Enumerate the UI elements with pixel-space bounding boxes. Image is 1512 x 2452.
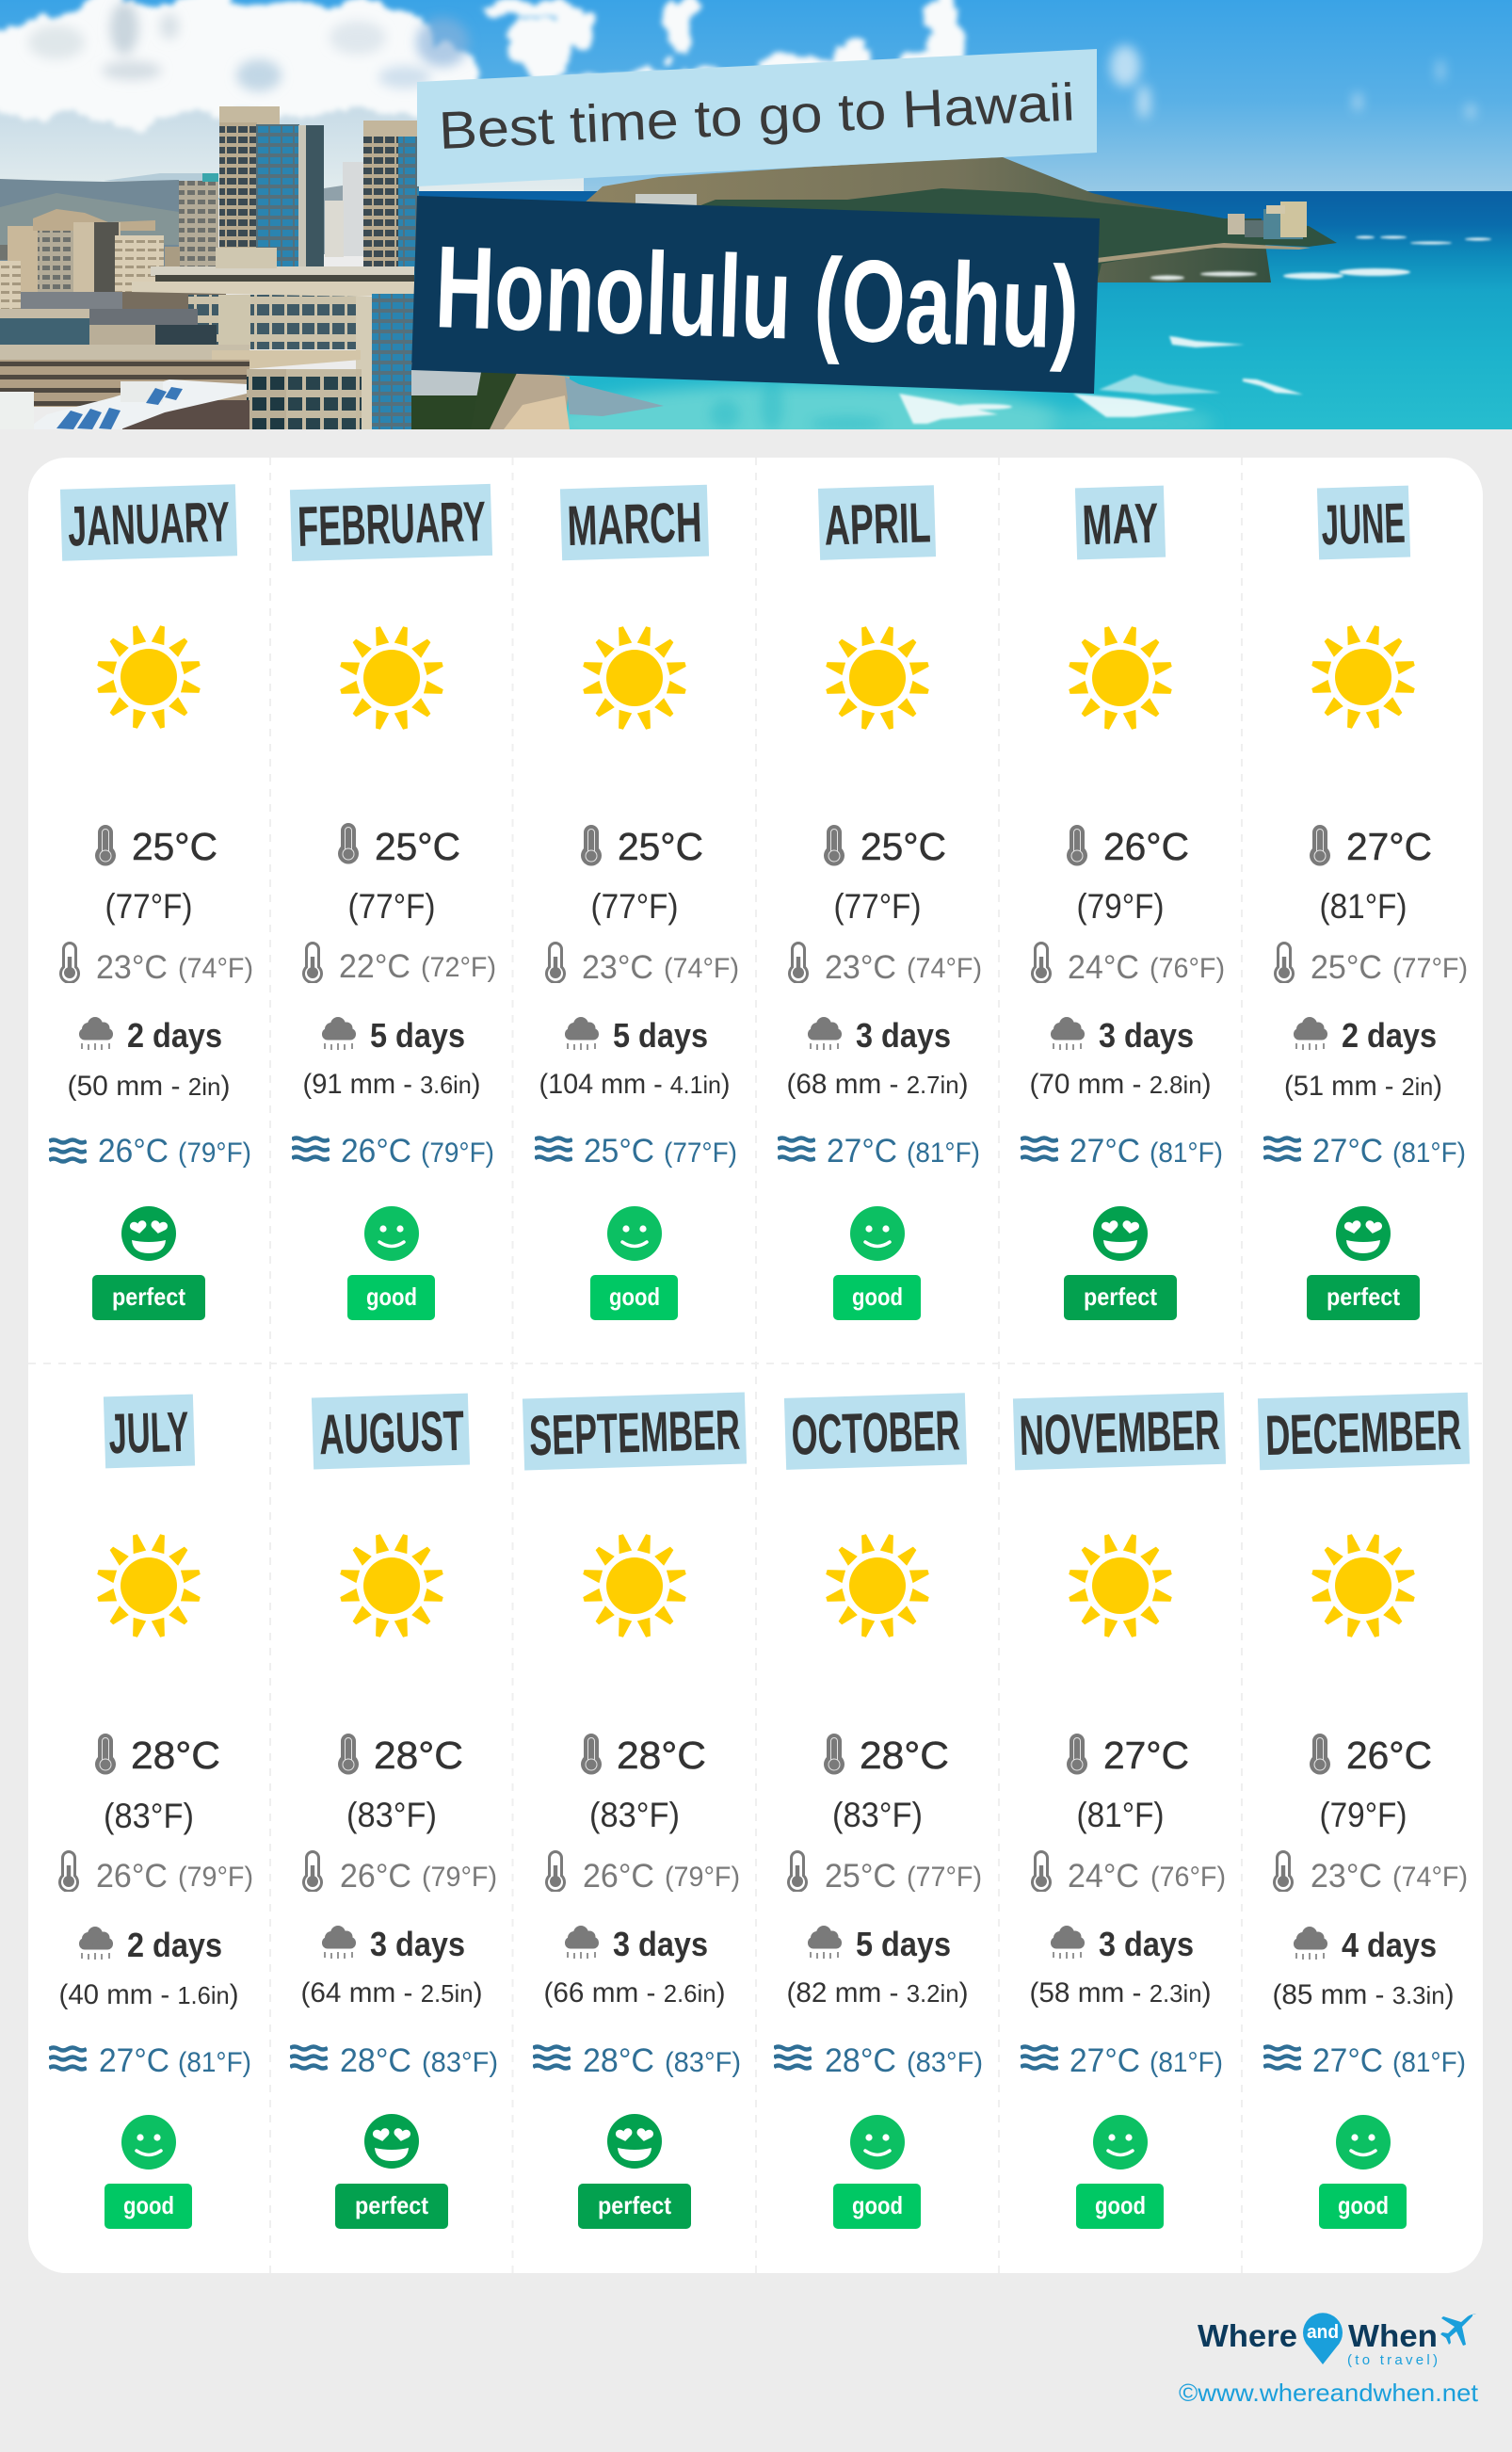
rainfall — [544, 1925, 725, 2008]
high temperature: (77°F) — [105, 887, 192, 926]
rating: good — [1076, 2115, 1164, 2229]
month label: SEPTEMBER — [528, 1398, 741, 1467]
month: June — [1263, 486, 1468, 1320]
rating: perfect: perfect — [1084, 1282, 1157, 1311]
sea temperature: (81°F) — [1392, 1137, 1466, 1169]
rating: good — [833, 2115, 921, 2229]
low temperature — [1032, 944, 1225, 986]
low temperature — [1275, 944, 1468, 986]
low temperature: 25°C — [825, 1858, 896, 1895]
month label: OCTOBER — [791, 1398, 960, 1467]
icon: airplane — [1440, 2315, 1476, 2346]
high temperature: 26°C — [1103, 825, 1189, 868]
rating: good — [833, 1206, 921, 1320]
sea temperature — [535, 1133, 737, 1170]
rainfall: (66 mm - 2.6in) — [544, 1977, 725, 2008]
rainfall: 2 days — [127, 1926, 222, 1964]
high temperature — [1067, 825, 1189, 926]
month label: JULY — [108, 1400, 190, 1465]
sea temperature: 27°C — [1070, 1133, 1140, 1170]
rainfall — [1284, 1016, 1442, 1102]
rainfall: (51 mm - 2in) — [1284, 1071, 1442, 1102]
low temperature — [1032, 1851, 1226, 1895]
low temperature: 25°C — [1311, 949, 1382, 986]
month: November — [1013, 1393, 1226, 2229]
rating: good: good — [609, 1282, 660, 1311]
month: May — [1021, 486, 1225, 1320]
icon: sun — [1068, 625, 1173, 731]
low temperature: 26°C — [340, 1858, 411, 1895]
low temperature: 23°C — [582, 949, 653, 986]
rating: good — [1319, 2115, 1407, 2229]
month: March — [535, 485, 739, 1320]
rainfall: 5 days — [370, 1016, 465, 1055]
icon: sun — [339, 625, 444, 731]
month label: JANUARY — [67, 490, 231, 558]
rainfall — [1273, 1926, 1454, 2010]
rating: perfect: perfect — [355, 2191, 428, 2219]
rainfall — [787, 1016, 968, 1100]
low temperature: (74°F) — [1392, 1862, 1468, 1893]
low temperature — [546, 1851, 740, 1895]
sea temperature: (81°F) — [1392, 2047, 1466, 2078]
rating: good: good — [1095, 2191, 1146, 2219]
rainfall: (70 mm - 2.8in) — [1030, 1069, 1211, 1100]
month label — [1013, 1393, 1226, 1470]
high temperature — [1310, 825, 1432, 926]
subtitle banner: Best time to go to Hawaii — [438, 72, 1076, 160]
sea temperature: 27°C — [827, 1133, 897, 1170]
rating: perfect — [1307, 1206, 1420, 1320]
low temperature: (77°F) — [907, 1862, 982, 1893]
rainfall — [59, 1926, 239, 2010]
high temperature: 25°C — [132, 825, 217, 868]
rainfall: (91 mm - 3.6in) — [303, 1069, 481, 1100]
high temperature: 28°C — [860, 1734, 949, 1777]
high temperature: (81°F) — [1077, 1796, 1164, 1834]
sea temperature — [1263, 1133, 1466, 1170]
low temperature: 24°C — [1068, 1858, 1139, 1895]
icon: location pin: and — [1307, 2322, 1339, 2343]
high temperature: 28°C — [617, 1734, 706, 1777]
rating: perfect — [92, 1206, 205, 1320]
rating: good: good — [123, 2191, 174, 2219]
rating: good: good — [852, 1282, 903, 1311]
month label — [312, 1394, 470, 1469]
low temperature: 23°C — [96, 949, 168, 986]
sea temperature — [290, 2042, 498, 2079]
sea temperature: 26°C — [98, 1133, 169, 1170]
high temperature — [581, 825, 703, 926]
high temperature: (79°F) — [1077, 887, 1164, 926]
rainfall: (58 mm - 2.3in) — [1030, 1977, 1211, 2008]
low temperature: (72°F) — [421, 952, 496, 983]
low temperature: 24°C — [1068, 949, 1139, 986]
icon: sun — [96, 624, 201, 730]
rainfall: 3 days — [1099, 1925, 1194, 1963]
low temperature — [303, 944, 496, 985]
sea temperature: 28°C — [340, 2042, 411, 2079]
month label: NOVEMBER — [1019, 1398, 1220, 1467]
rainfall: (104 mm - 4.1in) — [539, 1069, 731, 1100]
panel: monthly climate card — [28, 458, 1483, 2273]
icon: sun — [1068, 1533, 1173, 1638]
sea temperature: 27°C — [99, 2042, 169, 2079]
high temperature: (79°F) — [1320, 1796, 1407, 1834]
rainfall: (50 mm - 2in) — [68, 1071, 231, 1102]
low temperature: 26°C — [583, 1858, 654, 1895]
low temperature: 22°C — [339, 948, 410, 985]
high temperature: 25°C — [375, 825, 460, 868]
rainfall: (68 mm - 2.7in) — [787, 1069, 968, 1100]
month: August — [290, 1394, 498, 2229]
month label — [1075, 486, 1166, 559]
low temperature — [1275, 1851, 1468, 1895]
sea temperature: (83°F) — [422, 2047, 498, 2078]
month label — [1317, 486, 1410, 559]
high temperature: 26°C — [1346, 1734, 1432, 1777]
icon: sun — [825, 1533, 930, 1638]
icon: sun — [825, 625, 930, 731]
rainfall: (82 mm - 3.2in) — [787, 1977, 968, 2008]
sea temperature: 27°C — [1312, 2042, 1383, 2079]
rainfall — [539, 1016, 731, 1100]
rating: good — [590, 1206, 678, 1320]
sea temperature: 28°C — [583, 2042, 654, 2079]
month label: FEBRUARY — [297, 490, 487, 558]
high temperature: 25°C — [618, 825, 703, 868]
rainfall — [68, 1016, 231, 1102]
low temperature — [303, 1851, 497, 1895]
high temperature: (83°F) — [346, 1796, 437, 1834]
sea temperature — [1021, 2042, 1223, 2079]
low temperature — [789, 1851, 982, 1895]
sea temperature — [49, 2042, 251, 2079]
high temperature — [1067, 1734, 1189, 1834]
icon: sun — [339, 1533, 444, 1638]
sea temperature — [49, 1133, 251, 1170]
high temperature: 28°C — [131, 1734, 220, 1777]
rating: good: good — [1338, 2191, 1389, 2219]
low temperature: (79°F) — [178, 1862, 253, 1893]
month: April — [778, 485, 982, 1320]
rainfall: 2 days — [127, 1016, 222, 1055]
icon: location pin — [1303, 2313, 1343, 2364]
low temperature: (74°F) — [178, 953, 253, 984]
month: December — [1258, 1393, 1470, 2229]
low temperature: (77°F) — [1392, 953, 1468, 984]
sea temperature: 27°C — [1312, 1133, 1383, 1170]
rainfall: 3 days — [856, 1016, 951, 1055]
icon: sun — [96, 1533, 201, 1638]
rating: good: good — [852, 2191, 903, 2219]
rating: perfect — [335, 2114, 448, 2229]
rainfall: 5 days — [613, 1016, 708, 1055]
high temperature: 27°C — [1346, 825, 1432, 868]
month label: JUNE — [1321, 492, 1407, 557]
rainfall — [1030, 1016, 1211, 1100]
high temperature — [95, 1734, 220, 1835]
low temperature: (76°F) — [1150, 1862, 1226, 1893]
month: January — [49, 484, 253, 1320]
rainfall: (40 mm - 1.6in) — [59, 1979, 239, 2010]
icon: sun — [1311, 624, 1416, 730]
sea temperature — [778, 1133, 980, 1170]
sea temperature: (79°F) — [178, 1137, 251, 1169]
high temperature — [95, 825, 217, 926]
rainfall: 2 days — [1342, 1016, 1437, 1055]
rating: perfect: perfect — [598, 2191, 671, 2219]
month: February — [290, 484, 496, 1320]
low temperature: (79°F) — [422, 1862, 497, 1893]
month label: MAY — [1082, 492, 1160, 557]
high temperature — [1310, 1734, 1432, 1834]
rainfall — [303, 1016, 480, 1100]
month label: APRIL — [824, 491, 932, 557]
high temperature: (77°F) — [591, 887, 678, 926]
rainfall: (64 mm - 2.5in) — [301, 1977, 482, 2008]
sea temperature — [1263, 2042, 1466, 2079]
month label — [523, 1393, 747, 1470]
logo: Where and When (to travel) — [1198, 2313, 1476, 2368]
sea temperature: 26°C — [341, 1133, 411, 1170]
low temperature: (79°F) — [665, 1862, 740, 1893]
rainfall: 4 days — [1342, 1926, 1437, 1964]
month label — [818, 485, 936, 560]
rainfall: (85 mm - 3.3in) — [1273, 1979, 1454, 2010]
title banner — [411, 196, 1100, 394]
high temperature: (77°F) — [348, 887, 435, 926]
rainfall — [301, 1925, 482, 2008]
low temperature: 26°C — [96, 1858, 168, 1895]
rating: good — [105, 2115, 192, 2229]
high temperature — [338, 823, 460, 926]
high temperature: (81°F) — [1320, 887, 1407, 926]
high temperature: 27°C — [1103, 1734, 1189, 1777]
logo: Where and When (to travel): When — [1348, 2318, 1438, 2353]
sea temperature — [292, 1133, 494, 1170]
rating: perfect: perfect — [1327, 1282, 1400, 1311]
high temperature: 25°C — [861, 825, 946, 868]
sea temperature: (83°F) — [665, 2047, 741, 2078]
month: October — [774, 1393, 983, 2229]
high temperature — [824, 825, 946, 926]
rainfall: 3 days — [370, 1925, 465, 1963]
high temperature: (83°F) — [832, 1796, 923, 1834]
sea temperature: (81°F) — [1150, 2047, 1223, 2078]
rating: perfect — [1064, 1206, 1177, 1320]
website credit: ©www.whereandwhen.net — [1179, 2379, 1479, 2407]
sea temperature: (83°F) — [907, 2047, 983, 2078]
icon: sun — [582, 1533, 687, 1638]
month label — [784, 1393, 967, 1470]
sea temperature: (79°F) — [421, 1137, 494, 1169]
low temperature — [60, 1851, 253, 1895]
icon: sun — [1311, 1533, 1416, 1638]
month: July — [49, 1395, 253, 2229]
low temperature: (74°F) — [664, 953, 739, 984]
sea temperature — [533, 2042, 741, 2079]
high temperature — [824, 1734, 949, 1834]
logo: Where and When (to travel): Where — [1198, 2318, 1297, 2353]
high temperature: (77°F) — [834, 887, 921, 926]
high temperature — [338, 1734, 463, 1834]
month label — [290, 484, 492, 561]
sea temperature — [1021, 1133, 1223, 1170]
rainfall — [1030, 1925, 1211, 2008]
subtitle banner — [417, 49, 1097, 186]
sea temperature: (81°F) — [178, 2047, 251, 2078]
icon: sun — [582, 625, 687, 731]
month label: MARCH — [567, 491, 703, 557]
low temperature — [60, 944, 253, 986]
rating: perfect — [578, 2114, 691, 2229]
sea temperature: 28°C — [825, 2042, 896, 2079]
high temperature: (83°F) — [104, 1797, 194, 1835]
sea temperature — [774, 2042, 983, 2079]
sea temperature: 27°C — [1070, 2042, 1140, 2079]
month label: AUGUST — [318, 1399, 465, 1466]
hero photo: Waikiki skyline and ocean — [0, 0, 1512, 463]
month label — [104, 1395, 195, 1468]
rainfall: 5 days — [856, 1925, 951, 1963]
low temperature: (74°F) — [907, 953, 982, 984]
sea temperature: 25°C — [584, 1133, 654, 1170]
low temperature: 23°C — [825, 949, 896, 986]
logo: Where and When (to travel): (to travel) — [1347, 2352, 1438, 2368]
month label — [60, 484, 237, 561]
title banner: Honolulu (Oahu) — [433, 222, 1081, 374]
high temperature: (83°F) — [589, 1796, 680, 1834]
sea temperature: (81°F) — [1150, 1137, 1223, 1169]
rainfall: 3 days — [1099, 1016, 1194, 1055]
low temperature — [546, 944, 739, 986]
month label — [560, 485, 709, 560]
low temperature: (76°F) — [1150, 953, 1225, 984]
low temperature: 23°C — [1311, 1858, 1382, 1895]
rainfall — [787, 1925, 968, 2008]
sea temperature: (81°F) — [907, 1137, 980, 1169]
rating: good — [347, 1206, 435, 1320]
sea temperature: (77°F) — [664, 1137, 737, 1169]
high temperature: 28°C — [374, 1734, 463, 1777]
rating: good: good — [366, 1282, 417, 1311]
rainfall: 3 days — [613, 1925, 708, 1963]
month: September — [523, 1393, 747, 2229]
high temperature — [581, 1734, 706, 1834]
rating: perfect: perfect — [112, 1282, 185, 1311]
low temperature — [789, 944, 982, 986]
